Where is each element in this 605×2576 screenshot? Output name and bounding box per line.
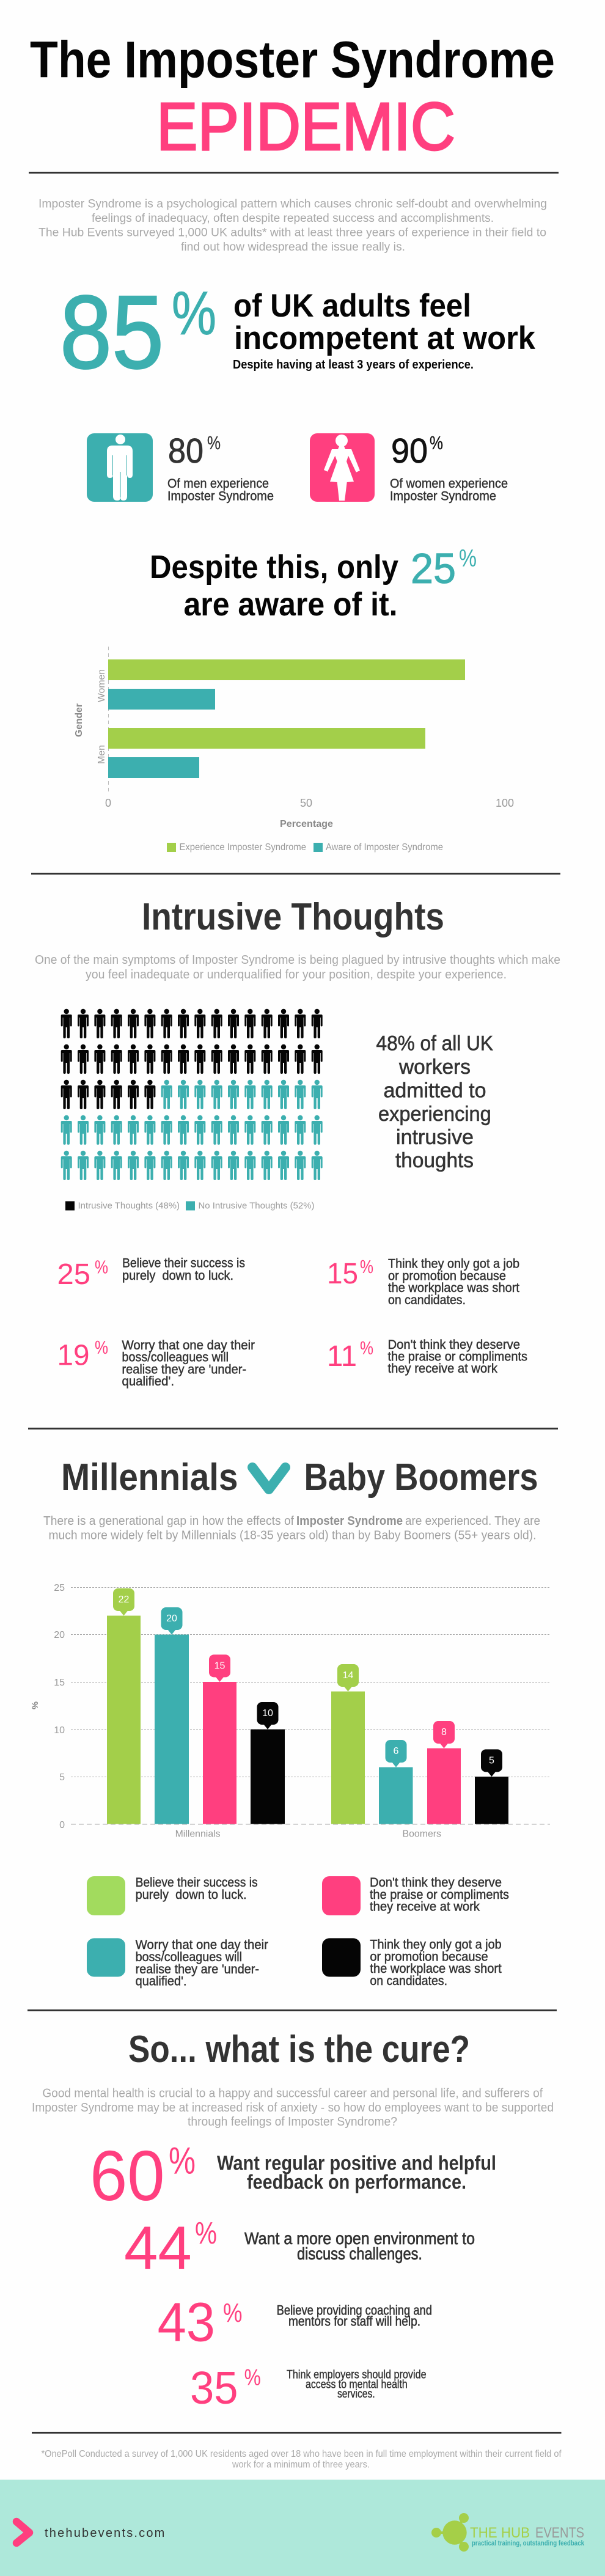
x axis title: Percentage <box>280 819 333 829</box>
logo: the hub events: practical training, outstanding feedback <box>472 2540 585 2547</box>
category labels <box>175 1829 441 1840</box>
heading: millennials v baby boomers <box>61 1456 538 1499</box>
x axis labels: 100 <box>496 797 514 809</box>
stat: 60% feedback: feedback on performance. <box>247 2171 466 2193</box>
stat: 19% under-qualified: 19 <box>57 1340 89 1372</box>
cure paragraph: through feelings of Imposter Syndrome? <box>188 2115 397 2129</box>
title line: EPIDEMIC: EPIDEMIC <box>156 89 455 164</box>
footnote <box>42 2449 562 2470</box>
legend: Experience Imposter Syndrome <box>180 842 306 853</box>
pictogram legend: Intrusive Thoughts (48%) <box>78 1200 180 1211</box>
value labels: 10 <box>262 1708 273 1719</box>
intro paragraph: Imposter Syndrome is a psychological pattern which causes chronic self-doubt and overwhelming <box>38 198 547 210</box>
pictogram legend: No Intrusive Thoughts (52%) <box>198 1200 314 1211</box>
stat: 11% praise: % <box>360 1337 373 1359</box>
x axis labels: 0 <box>105 797 111 809</box>
logo: the hub events <box>431 2513 585 2552</box>
heading: despite this, only 25% are aware: Despite this, only <box>150 549 398 585</box>
value labels: 15 <box>215 1661 225 1671</box>
intro paragraph: feelings of inadequacy, often despite repeated success and accomplishments. <box>92 212 494 225</box>
callout: 48% of all UK workers: experiencing <box>378 1103 491 1126</box>
x axis labels <box>105 797 514 809</box>
stat: 43% coaching: mentors for staff will help. <box>288 2314 420 2329</box>
80 percent: 80 <box>168 431 204 471</box>
stat: 44% open environment: 44 <box>124 2214 192 2282</box>
bars: millennials <box>107 1616 285 1824</box>
intrusive thoughts paragraph <box>35 953 560 982</box>
y axis labels: 25 <box>54 1583 65 1593</box>
callout: 48% of all UK workers: workers <box>398 1055 471 1079</box>
value labels <box>119 1594 494 1766</box>
stat: 35% mental health: 35 <box>190 2362 238 2413</box>
stat: 35% mental health: services. <box>337 2388 375 2401</box>
men caption: Imposter Syndrome <box>167 489 274 504</box>
value pins <box>113 1588 502 1777</box>
80 percent: % <box>207 432 221 453</box>
stat: 60% feedback: 60 <box>90 2136 165 2215</box>
pictogram: 80 people <box>61 1009 323 1180</box>
callout: 48% of all UK workers: intrusive <box>396 1126 474 1149</box>
legend: short on candidates: the workplace was short <box>370 1962 502 1976</box>
icon: woman <box>310 433 375 502</box>
category labels: Boomers <box>402 1829 441 1840</box>
90 percent: 90 <box>391 431 428 471</box>
big number 85%: 85 <box>60 274 164 391</box>
legend: praise: the praise or compliments <box>370 1888 509 1902</box>
stat: 25% luck: Believe their success is <box>122 1257 245 1271</box>
title <box>30 31 555 164</box>
stat: 60% feedback <box>90 2136 496 2215</box>
footer band <box>0 2480 605 2576</box>
generational gap paragraph: much more widely felt by Millennials (18-35 years old) than by Baby Boomers (55+ years old). <box>49 1529 537 1543</box>
value labels: 14 <box>343 1670 353 1681</box>
stat: 11% praise: 11 <box>327 1340 357 1373</box>
men caption: Of men experience <box>167 477 269 491</box>
stat: 11% praise: the praise or compliments <box>387 1350 527 1364</box>
generational gap paragraph: are experienced. They are <box>405 1514 540 1528</box>
legend: Aware of Imposter Syndrome <box>326 842 443 853</box>
stat: 44% open environment: discuss challenges. <box>297 2244 422 2263</box>
stat: 35% mental health: % <box>244 2365 261 2391</box>
footnote: work for a minimum of three years. <box>232 2460 370 2470</box>
headline text: of UK adults feel <box>233 288 471 324</box>
x axis labels: 50 <box>300 797 312 809</box>
y axis title: Gender <box>74 703 84 737</box>
y axis labels: 20 <box>54 1630 65 1640</box>
cure paragraph: Imposter Syndrome may be at increased risk of anxiety - so how do employees want to be supported <box>32 2101 554 2115</box>
stat: 44% open environment: % <box>195 2215 217 2250</box>
icon: man <box>87 433 153 502</box>
y axis labels: 5 <box>59 1772 65 1783</box>
icon: teal chevron <box>252 1467 285 1489</box>
legend: success down to luck: purely down to luck. <box>136 1888 247 1902</box>
stat: 43% coaching <box>158 2292 432 2354</box>
legend: under-qualified: qualified'. <box>136 1975 187 1989</box>
stat: 43% coaching: Believe providing coaching and <box>277 2302 432 2317</box>
callout: 48% of all UK workers: thoughts <box>395 1149 474 1172</box>
stat: 15% short on candidates: 15 <box>327 1258 358 1290</box>
stat: 25% luck: 25 <box>57 1258 90 1291</box>
bar chart: gender awareness <box>74 647 514 853</box>
callout: 48% of all UK workers: admitted to <box>384 1079 486 1103</box>
cure paragraph: Good mental health is crucial to a happy and successful career and personal life, and sufferers of <box>42 2087 543 2101</box>
y axis labels <box>54 1583 65 1830</box>
generational gap paragraph: There is a generational gap in how the effects of <box>43 1514 294 1528</box>
stat: 19% under-qualified: qualified'. <box>122 1374 174 1389</box>
pictogram legend <box>65 1200 314 1211</box>
intrusive thoughts paragraph: One of the main symptoms of Imposter Syndrome is being plagued by intrusive thoughts which make <box>35 953 560 967</box>
stat: 25% luck <box>57 1257 245 1291</box>
legend <box>167 842 443 853</box>
category labels: Millennials <box>175 1829 221 1840</box>
bars: boomers <box>331 1692 508 1824</box>
headline text: incompetent at work <box>234 320 535 356</box>
women caption <box>390 477 508 504</box>
stat: 44% open environment: Want a more open environment to <box>244 2229 475 2248</box>
legend: under-qualified: Worry that one day their <box>136 1938 268 1952</box>
stat: 35% mental health: access to mental health <box>306 2378 408 2391</box>
stat: 11% praise <box>327 1337 527 1376</box>
stat: 35% mental health: Think employers should provide <box>287 2369 427 2381</box>
stat: 25% luck: purely down to luck. <box>122 1269 233 1283</box>
y axis labels: Men <box>97 745 107 764</box>
stat: 15% short on candidates: % <box>360 1256 373 1277</box>
value labels: 5 <box>489 1755 494 1766</box>
legend: success down to luck <box>87 1876 258 1915</box>
column chart: millennials vs boomers <box>30 1583 550 1840</box>
y axis title: % <box>30 1701 40 1709</box>
stat: 19% under-qualified: realise they are 'under- <box>122 1363 246 1376</box>
intro paragraph: The Hub Events surveyed 1,000 UK adults* with at least three years of experience in their field to <box>38 226 546 240</box>
legend: short on candidates <box>322 1937 502 1988</box>
stat: 35% mental health <box>190 2362 427 2413</box>
stat: 15% short on candidates <box>327 1256 519 1307</box>
bars: men <box>108 728 425 778</box>
stat: 44% open environment <box>124 2214 475 2282</box>
website: thehubevents.com <box>45 2526 164 2540</box>
value labels: 22 <box>119 1594 130 1605</box>
panel: men stat <box>87 431 274 504</box>
legend: success down to luck: Believe their success is <box>136 1876 258 1890</box>
intrusive thoughts paragraph: you feel inadequate or underqualified for your position, despite your experience. <box>86 968 507 982</box>
legend: short on candidates: or promotion because <box>370 1950 488 1964</box>
legend: praise <box>322 1876 509 1915</box>
stat: 19% under-qualified <box>57 1337 255 1389</box>
legend: short on candidates: Think they only got a job <box>370 1937 502 1952</box>
cure paragraph <box>32 2087 554 2129</box>
y axis labels <box>97 669 107 764</box>
value labels: 8 <box>441 1727 447 1738</box>
callout: 48% of all UK workers <box>376 1032 493 1172</box>
y axis labels: Women <box>97 669 107 702</box>
bars: women <box>108 659 465 710</box>
legend: under-qualified: boss/colleagues will <box>136 1950 242 1964</box>
heading: so what is the cure: So... what is the cure? <box>128 2028 470 2071</box>
stat: 19% under-qualified: Worry that one day their <box>122 1338 255 1352</box>
heading: despite this, only 25% are aware <box>150 545 477 623</box>
headline stat: 85% <box>60 274 535 391</box>
legend: short on candidates: on candidates. <box>370 1974 447 1988</box>
headline text <box>233 288 535 372</box>
panel: women stat <box>310 431 508 504</box>
stat: 25% luck: % <box>95 1257 108 1277</box>
heading: despite this, only 25% are aware: 25 <box>411 545 456 592</box>
stat: 19% under-qualified: % <box>95 1337 108 1358</box>
logo: the hub events: EVENTS <box>535 2525 584 2541</box>
stat: 60% feedback: Want regular positive and helpful <box>217 2151 496 2174</box>
heading: intrusive thoughts: Intrusive Thoughts <box>142 896 444 938</box>
legend: praise: Don't think they deserve <box>370 1876 502 1890</box>
women caption: Imposter Syndrome <box>390 489 496 504</box>
stat: 15% short on candidates: on candidates. <box>388 1293 466 1307</box>
stat: 15% short on candidates: or promotion because <box>388 1269 506 1283</box>
stat: 15% short on candidates: the workplace was short <box>388 1281 519 1295</box>
y axis labels: 0 <box>59 1820 65 1830</box>
legend: praise: they receive at work <box>370 1900 480 1914</box>
logo: the hub events: THE HUB <box>470 2525 530 2541</box>
generational gap paragraph: Imposter Syndrome <box>296 1514 403 1528</box>
women caption: Of women experience <box>390 477 508 491</box>
stat: 43% coaching: % <box>223 2298 242 2328</box>
y axis labels: 10 <box>54 1725 65 1736</box>
generational gap paragraph <box>43 1514 540 1543</box>
headline text: Despite having at least 3 years of experience. <box>233 358 474 372</box>
intro paragraph <box>38 198 547 254</box>
legend: under-qualified: realise they are 'under- <box>136 1962 259 1976</box>
value labels: 6 <box>394 1746 399 1756</box>
heading: despite this, only 25% are aware: % <box>459 545 477 572</box>
heading: millennials v baby boomers: Baby Boomers <box>304 1456 538 1499</box>
intro paragraph: find out how widespread the issue really is. <box>181 241 405 254</box>
big number 85%: % <box>172 279 216 348</box>
y axis labels: 15 <box>54 1678 65 1688</box>
stat: 11% praise: they receive at work <box>387 1362 497 1376</box>
heading: millennials v baby boomers: Millennials <box>61 1456 238 1499</box>
title line: The Imposter Syndrome: The Imposter Syndrome <box>30 31 555 88</box>
legend: under-qualified <box>87 1938 268 1989</box>
callout: 48% of all UK workers: 48% of all UK <box>376 1032 493 1055</box>
heading: despite this, only 25% are aware: are aware of it. <box>183 586 397 623</box>
icon: pink arrow <box>16 2522 29 2543</box>
stat: 43% coaching: 43 <box>158 2292 215 2354</box>
stat: 15% short on candidates: Think they only got a job <box>388 1257 519 1271</box>
men caption <box>167 477 274 504</box>
footnote: *OnePoll Conducted a survey of 1,000 UK residents aged over 18 who have been in full time employment within their current field of <box>42 2449 562 2459</box>
stat: 11% praise: Don't think they deserve <box>387 1338 520 1352</box>
stat: 60% feedback: % <box>169 2140 196 2182</box>
value labels: 20 <box>166 1613 177 1624</box>
stat: 19% under-qualified: boss/colleagues will <box>122 1351 229 1365</box>
90 percent: % <box>430 432 443 453</box>
